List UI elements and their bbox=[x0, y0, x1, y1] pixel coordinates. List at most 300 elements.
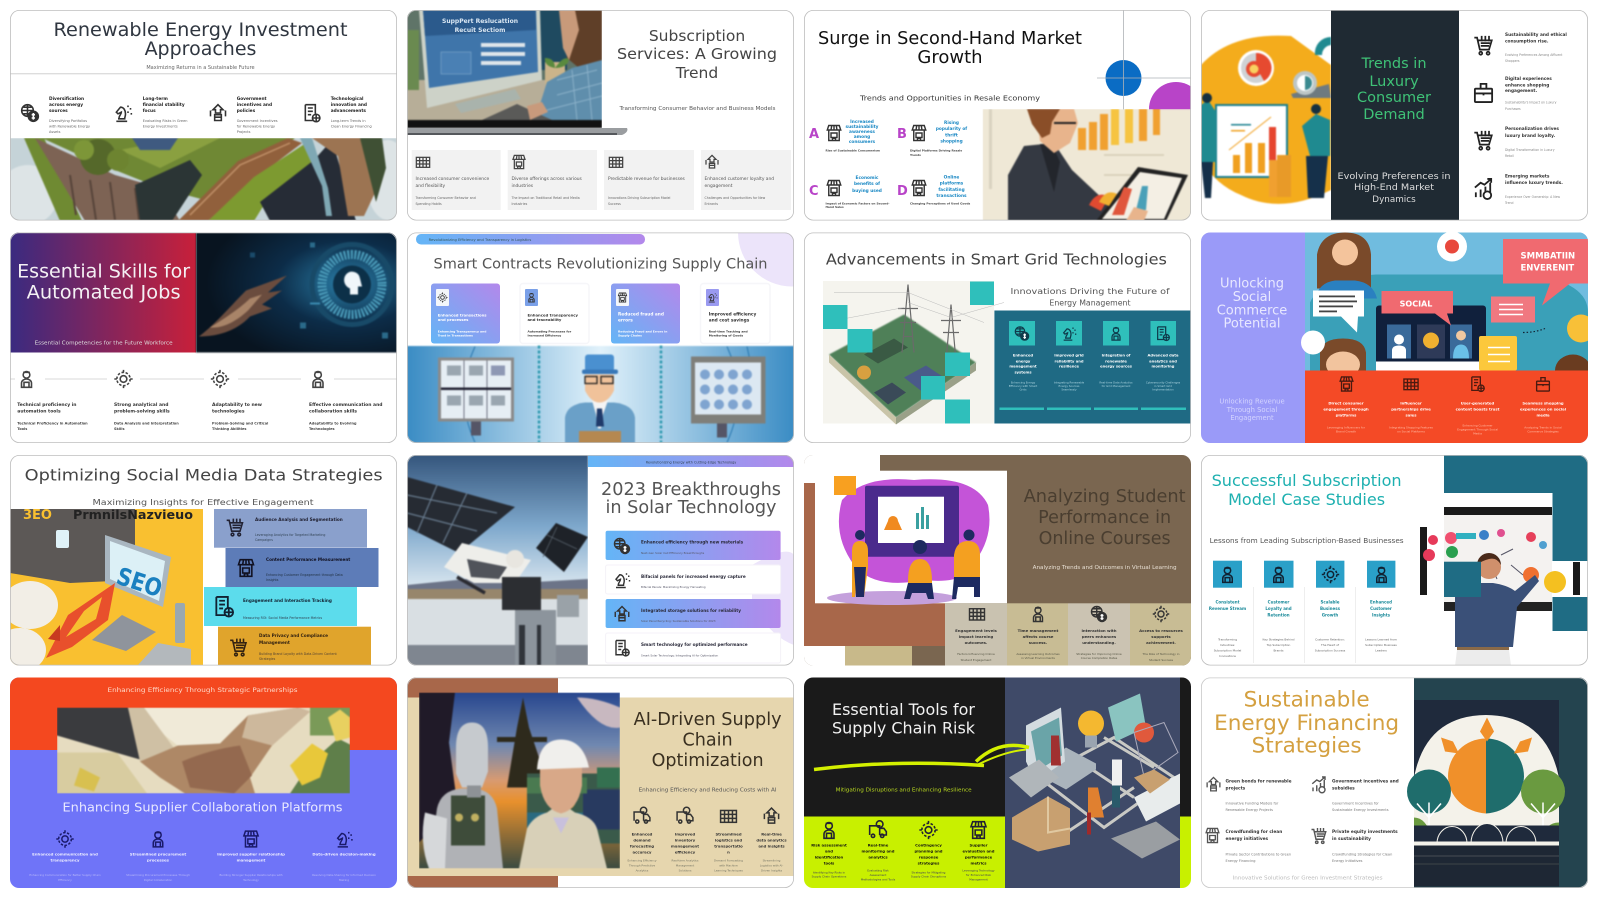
columns: and insights bbox=[758, 844, 785, 848]
bottom cards: achievement. bbox=[1146, 640, 1176, 645]
image: students and presenter bbox=[815, 471, 1007, 605]
cards row: Trust in Transactions bbox=[438, 334, 473, 338]
columns: management bbox=[671, 844, 699, 848]
bottom cards bbox=[945, 603, 1191, 666]
columns: processes bbox=[147, 858, 170, 862]
orange panel with columns: experiences on social bbox=[1520, 406, 1566, 412]
columns: response bbox=[919, 854, 939, 860]
title: Model Case Studies bbox=[1228, 490, 1385, 509]
teal panel with columns: resilience bbox=[1059, 364, 1080, 368]
bottom cards: Access to resources bbox=[1139, 628, 1183, 633]
orange panel with columns: Seamless shopping bbox=[1522, 400, 1564, 406]
slide: Unlocking Social Commerce Potential bbox=[1201, 232, 1595, 444]
item D: Online bbox=[944, 174, 959, 180]
item B bbox=[897, 120, 967, 157]
key points row: Projects bbox=[237, 130, 251, 134]
orange panel with columns: Commerce Strategies bbox=[1527, 430, 1559, 434]
cards row: Entrants bbox=[704, 202, 718, 206]
image: social commerce illustration: ENVERENIT bbox=[1520, 264, 1574, 274]
case study columns: Top Subscription bbox=[1266, 643, 1291, 647]
skills row: Technical Proficiency in Automation bbox=[17, 422, 88, 426]
title: Chain bbox=[682, 730, 733, 750]
cards row: Innovations Driving Subscription Model bbox=[608, 196, 671, 200]
columns: Assessment bbox=[870, 873, 887, 877]
title: Optimizing Social Media Data Strategies bbox=[25, 466, 383, 485]
columns: Solutions bbox=[679, 868, 692, 872]
card 3 bbox=[204, 587, 357, 626]
orange panel with columns: Integrating Shopping Features bbox=[1389, 426, 1433, 430]
orange panel with columns bbox=[1305, 370, 1588, 444]
case study columns: Loyalty and bbox=[1265, 606, 1292, 611]
columns: Supply Chain Disruptions bbox=[911, 874, 947, 878]
title: in Solar Technology bbox=[606, 497, 776, 518]
orange panel with columns: Engagement Through Social bbox=[1457, 428, 1498, 432]
key points row: focus bbox=[143, 108, 156, 114]
key points row: for Renewable Energy bbox=[237, 124, 275, 128]
skills row: Data Analysis and Interpretation bbox=[114, 422, 179, 426]
list items: Bifacial panels for increased energy capture bbox=[641, 574, 746, 579]
background blocks bbox=[804, 455, 945, 666]
key points column: Retail bbox=[1505, 154, 1514, 158]
columns: Streamlined bbox=[715, 832, 742, 836]
columns: for Enhanced Risk bbox=[966, 873, 992, 877]
columns: inventory bbox=[675, 838, 696, 842]
key points row: Long-term Trends in bbox=[331, 119, 366, 123]
title: Commerce bbox=[1217, 304, 1287, 318]
orange panel with columns: Leveraging Influencers for bbox=[1327, 426, 1366, 430]
key points row: policies bbox=[237, 108, 256, 114]
card 4 bbox=[218, 627, 371, 666]
columns: with Machine bbox=[719, 864, 738, 868]
skills row: automation tools bbox=[17, 408, 61, 414]
item D bbox=[897, 174, 971, 205]
card 2: Enhancing Customer Engagement through Data bbox=[266, 573, 343, 577]
strategies grid: Government Incentives for bbox=[1332, 802, 1379, 806]
title: Social bbox=[1233, 290, 1271, 305]
item A: A bbox=[809, 127, 819, 142]
strategies grid: Private Sector Contributions to Green bbox=[1226, 852, 1291, 856]
item D: facilitating bbox=[938, 187, 965, 193]
case study columns: Key Strategies Behind bbox=[1263, 638, 1295, 642]
cards row: Reduced fraud and bbox=[618, 312, 664, 318]
key points column: luxury brand loyalty. bbox=[1505, 133, 1556, 139]
title: Unlocking bbox=[1220, 276, 1284, 292]
item C: buying used bbox=[852, 188, 882, 194]
title: Advancements in Smart Grid Technologies bbox=[826, 250, 1167, 268]
subtitle bbox=[1219, 398, 1285, 422]
teal blocks bbox=[1444, 455, 1588, 631]
key points column: Personalization drives bbox=[1505, 126, 1559, 132]
slide: Renewable Energy Investment Approaches bbox=[0, 10, 410, 225]
card 3: Measuring ROI: Social Media Performance Metrics bbox=[243, 616, 323, 620]
pill label: Revolutionizing Efficiency and Transparency in Logistics bbox=[429, 238, 531, 242]
title bbox=[832, 700, 976, 738]
columns: Data-driven decision-making bbox=[312, 852, 376, 856]
orange panel with columns: partnerships drive bbox=[1391, 406, 1431, 412]
subtitle: Analyzing Trends and Outcomes in Virtual Learning bbox=[1033, 565, 1177, 571]
bottom cards: Factors Influencing Online bbox=[957, 652, 995, 656]
case study columns: Customer bbox=[1268, 600, 1289, 605]
title: Performance in bbox=[1038, 508, 1171, 528]
key points column: Experience Over Ownership: A New bbox=[1505, 195, 1561, 199]
teal panel with columns: analytics and bbox=[1149, 360, 1177, 364]
orange panel with columns: Analyzing Trends in Social bbox=[1524, 426, 1562, 430]
title: Analyzing Student bbox=[1024, 487, 1186, 507]
subtitle: Lessons from Leading Subscription-Based Businesses bbox=[1210, 537, 1404, 545]
slide: Optimizing Social Media Data Strategies bbox=[0, 455, 397, 672]
strategies grid bbox=[1206, 777, 1399, 863]
key points row: Government bbox=[237, 96, 267, 102]
columns: tools bbox=[824, 860, 835, 866]
subtitle: Maximizing Insights for Effective Engagement bbox=[92, 497, 314, 507]
teal panel with columns: in Smart Grid bbox=[1154, 384, 1172, 388]
title: Essential Tools for bbox=[832, 700, 975, 719]
skills row: Tools bbox=[17, 427, 27, 431]
key points column: Shoppers bbox=[1505, 59, 1520, 63]
case study columns: Customer Retention: bbox=[1315, 638, 1345, 642]
skills row: Problem-Solving and Critical bbox=[212, 422, 268, 426]
image title text on screen bbox=[442, 18, 518, 32]
item D: Changing Perceptions of Used Goods bbox=[910, 201, 971, 205]
strategies grid: Renewable Energy Projects bbox=[1226, 808, 1273, 812]
cards row: Real-time Tracking and bbox=[709, 330, 748, 334]
item B: shopping bbox=[940, 138, 963, 144]
columns: Learning Techniques bbox=[714, 868, 743, 872]
key points row: innovation and bbox=[331, 102, 367, 108]
item A: consumers bbox=[849, 139, 876, 145]
key points row: Evaluating Risks in Green bbox=[143, 119, 187, 123]
orange panel with columns: Brand Growth bbox=[1336, 430, 1356, 434]
cards row: Enhanced transparency bbox=[528, 312, 579, 318]
columns: Digital Collaboration bbox=[144, 878, 173, 882]
case study columns: Retention bbox=[1267, 613, 1290, 618]
slide: Trends in Luxury Consumer Demand bbox=[1201, 10, 1588, 221]
slide: Successful Subscription Model Case Studies bbox=[1201, 455, 1588, 666]
card 4: Management bbox=[259, 640, 290, 645]
title: Sustainable bbox=[1244, 688, 1370, 712]
key points row: Diversification bbox=[49, 96, 84, 102]
top bar: Revolutionizing Energy with Cutting-Edge Technology bbox=[646, 460, 736, 464]
key points column: Emerging markets bbox=[1505, 174, 1550, 180]
top bar bbox=[588, 455, 794, 467]
key points row: sources bbox=[49, 108, 68, 114]
title: Services: A Growing bbox=[617, 45, 777, 63]
columns: planning and bbox=[914, 848, 943, 854]
key points column bbox=[1474, 32, 1567, 205]
columns: Leveraging Technology bbox=[962, 868, 995, 872]
title: Potential bbox=[1224, 316, 1280, 332]
key points column: Digital Transformation in Luxury bbox=[1505, 148, 1555, 152]
strategies grid: in sustainability bbox=[1332, 836, 1371, 842]
subtitle bbox=[1010, 287, 1170, 308]
teal panel with columns: Cybersecurity Challenges bbox=[1146, 380, 1181, 384]
title bbox=[634, 710, 782, 771]
cards row: Success bbox=[608, 202, 621, 206]
bottom cards: affects course bbox=[1023, 634, 1054, 639]
key points column: Trend bbox=[1504, 201, 1514, 205]
columns: Supply Chain Operations bbox=[812, 874, 847, 878]
columns: accuracy bbox=[633, 850, 652, 854]
image: logistics worker with screens bbox=[407, 346, 794, 444]
orange panel with columns: Direct consumer bbox=[1328, 400, 1364, 406]
image title text on screen: Recuit Sectiom bbox=[455, 27, 505, 34]
slide: AI-Driven Supply Chain Optimization bbox=[407, 678, 794, 888]
columns: Enhanced bbox=[632, 832, 653, 836]
title: Trends in bbox=[1360, 56, 1427, 72]
teal panel with columns: Enhanced bbox=[1013, 354, 1033, 358]
subtitle: Engagement bbox=[1230, 414, 1274, 422]
image: robot arm with solar panels bbox=[407, 455, 588, 666]
subtitle: Maximizing Returns in a Sustainable Future bbox=[146, 65, 255, 71]
case study columns: Customer bbox=[1370, 606, 1392, 611]
columns: Identifying Key Risks in bbox=[813, 870, 845, 874]
image: social commerce illustration: SOCIAL bbox=[1400, 300, 1432, 308]
teal panel with columns: energy sources bbox=[1100, 364, 1133, 368]
card 3: Engagement and Interaction Tracking bbox=[243, 598, 332, 603]
columns: Contingency bbox=[915, 842, 942, 848]
skills row: Adaptability to new bbox=[212, 402, 262, 408]
subtitle: Transforming Consumer Behavior and Business Models bbox=[618, 106, 776, 112]
columns: Resolving Data-Sharing for Informed Decision bbox=[312, 873, 376, 877]
columns: Management bbox=[969, 878, 989, 882]
cards row: Automating Processes for bbox=[528, 330, 572, 334]
skills row: Technologies bbox=[309, 427, 335, 431]
cards row: Supply Chains bbox=[618, 334, 642, 338]
item A bbox=[809, 119, 880, 153]
columns: and bbox=[825, 848, 833, 854]
skills row: technologies bbox=[212, 408, 245, 414]
skills row: Skills bbox=[114, 427, 125, 431]
case study columns: Revenue Stream bbox=[1209, 606, 1246, 611]
columns bbox=[29, 830, 376, 882]
slide: Advancements in Smart Grid Technologies bbox=[804, 232, 1191, 444]
case study columns: Leaders bbox=[1375, 649, 1387, 653]
image: sun and trees emblem bbox=[1407, 678, 1588, 888]
subtitle: Energy Management bbox=[1049, 298, 1131, 308]
image: laptop and man at computer bbox=[407, 10, 602, 128]
strategies grid: Green bonds for renewable bbox=[1226, 778, 1292, 784]
footer subtitle: Innovative Solutions for Green Investment Strategies bbox=[1233, 876, 1383, 882]
orange panel with columns: Enhancing Customer bbox=[1462, 424, 1493, 428]
image: floating green island bbox=[10, 138, 397, 220]
cards row: Industries bbox=[512, 202, 528, 206]
slide: Sustainable Energy Financing Strategies bbox=[1201, 678, 1588, 888]
card 1 bbox=[214, 509, 367, 548]
teal panel with columns: Grids bbox=[1019, 388, 1027, 392]
cards row: Increased consumer convenience bbox=[416, 176, 489, 182]
title bbox=[19, 264, 190, 302]
case study columns: Enhanced bbox=[1370, 600, 1392, 605]
title: Smart Contracts Revolutionizing Supply Chain bbox=[434, 256, 768, 272]
strategies grid: Innovative Funding Models for bbox=[1226, 802, 1279, 806]
gradient header panel bbox=[10, 232, 196, 352]
columns bbox=[811, 821, 995, 882]
item D: transactions bbox=[936, 193, 967, 199]
title bbox=[601, 479, 781, 518]
bottom cards: Student Engagement bbox=[961, 658, 992, 662]
strategies grid: Energy Financing bbox=[1226, 859, 1256, 863]
slide: Subscription Services bbox=[407, 10, 794, 221]
orange panel with columns: platforms bbox=[1336, 412, 1357, 418]
title bbox=[618, 30, 776, 78]
key points row: Technological bbox=[331, 96, 364, 102]
timeline bbox=[10, 378, 396, 380]
teal panel with columns: Improved grid bbox=[1054, 354, 1084, 358]
title: Surge in Second-Hand Market bbox=[818, 28, 1082, 49]
subtitle: Mitigating Disruptions and Enhancing Resilience bbox=[836, 788, 972, 794]
title bbox=[1357, 56, 1431, 123]
columns: identification bbox=[815, 854, 844, 860]
top subtitle: Enhancing Efficiency Through Strategic Partnerships bbox=[108, 687, 298, 694]
columns: Risk assessment bbox=[811, 842, 847, 848]
teal panel with columns: Enhancing Energy bbox=[1011, 380, 1036, 384]
teal panel with columns: renewable bbox=[1105, 360, 1127, 364]
columns: Driven Insights bbox=[761, 868, 783, 872]
subtitle: Essential Competencies for the Future Workforce bbox=[35, 340, 173, 346]
columns: strategies bbox=[918, 860, 940, 866]
columns: Improved bbox=[675, 832, 695, 836]
columns: Analytics bbox=[636, 868, 649, 872]
orange panel with columns: Media bbox=[1473, 432, 1482, 436]
card 1: Audience Analysis and Segmentation bbox=[255, 517, 343, 522]
slide: Surge in Second-Hand Market Growth bbox=[804, 10, 1203, 221]
list items: Next-Gen Solar Cell Efficiency Breakthroughs bbox=[641, 551, 705, 555]
image: man reviewing charts bbox=[983, 109, 1192, 221]
item D: platforms bbox=[940, 181, 964, 187]
strategies grid: subsidies bbox=[1332, 786, 1355, 792]
columns: transparency bbox=[50, 858, 80, 862]
slide: 2023 Breakthroughs in Solar Technology bbox=[407, 455, 794, 666]
orange panel with columns: media bbox=[1536, 412, 1550, 418]
subtitle bbox=[1338, 172, 1450, 205]
bottom cards: Engagement levels bbox=[955, 628, 998, 633]
teal panel with columns: Integrating Renewable bbox=[1054, 380, 1085, 384]
pill label bbox=[416, 234, 645, 244]
bottom cards: outcomes. bbox=[965, 640, 988, 645]
image title text on screen: SuppPert Reslucattion bbox=[442, 18, 518, 25]
columns: Efficiency bbox=[58, 878, 72, 882]
bottom cards: Assessing Learning Outcomes bbox=[1016, 652, 1060, 656]
columns: monitoring and bbox=[862, 848, 895, 854]
key points column: Evolving Preferences Among Affluent bbox=[1505, 53, 1563, 57]
columns: Supplier bbox=[970, 842, 988, 848]
key points row: advancements bbox=[331, 108, 366, 114]
bottom cards: Time management bbox=[1018, 628, 1059, 633]
key points row: with Renewable Energy bbox=[49, 124, 90, 128]
case study columns: The Heart of bbox=[1320, 643, 1340, 647]
orange panel with columns: Influencer bbox=[1400, 400, 1422, 406]
item A: among bbox=[854, 135, 870, 140]
columns: efficiency bbox=[675, 850, 696, 854]
case study columns: Lessons Learned from bbox=[1365, 638, 1397, 642]
teal panel with columns: Implementation bbox=[1152, 388, 1174, 392]
item C: Economic bbox=[856, 175, 879, 181]
key points row: Diversifying Portfolios bbox=[49, 119, 87, 123]
key points column: consumption rise. bbox=[1505, 39, 1549, 45]
columns: Strategies for Mitigating bbox=[912, 870, 946, 874]
strategies grid: projects bbox=[1226, 786, 1246, 792]
title bbox=[1217, 276, 1287, 332]
teal panel with columns: Seamlessly bbox=[1061, 388, 1077, 392]
title bbox=[1214, 688, 1399, 758]
teal panel with columns: Energy Sources bbox=[1059, 384, 1080, 388]
cards row: errors bbox=[618, 318, 633, 324]
case study columns: Consistent bbox=[1215, 600, 1240, 605]
background blocks bbox=[407, 678, 794, 888]
image: hand touching digital interface bbox=[196, 232, 397, 352]
list items: Smart Solar Technology: Integrating AI for Optimization bbox=[641, 654, 719, 658]
skills row: Technical proficiency in bbox=[17, 402, 77, 408]
image: social commerce illustration: SMMBATIIN bbox=[1520, 252, 1575, 262]
key points row: Clean Energy Financing bbox=[331, 124, 372, 128]
item B: thrift bbox=[945, 132, 958, 138]
image: robot and worker at port bbox=[419, 692, 620, 868]
item B: Rising bbox=[944, 120, 959, 126]
item C: Impact of Economic Factors on Second- bbox=[826, 201, 890, 205]
item C bbox=[809, 175, 890, 209]
columns: Evaluating Risk bbox=[867, 868, 889, 872]
columns: forecasting bbox=[630, 844, 654, 848]
key points column: engagement. bbox=[1505, 88, 1537, 94]
title: Online Courses bbox=[1039, 529, 1171, 549]
title: Renewable Energy Investment bbox=[54, 19, 348, 41]
item C: benefits of bbox=[854, 181, 880, 187]
teal panel with columns bbox=[994, 310, 1191, 424]
subtitle: High-End Market bbox=[1354, 183, 1435, 193]
columns: Building Stronger Supplier Relationships with bbox=[219, 873, 283, 877]
card 2 bbox=[226, 548, 378, 587]
key points row: financial stability bbox=[143, 102, 185, 108]
case study columns: Subscription Success bbox=[1315, 649, 1346, 653]
skills row: Effective communication and bbox=[309, 402, 382, 408]
card 2: Content Performance Measurement bbox=[266, 557, 350, 562]
case study columns: Growth bbox=[1322, 613, 1338, 618]
slide: Analyzing Student Performance in Online Courses bbox=[804, 455, 1191, 666]
cards row: Improved efficiency bbox=[709, 312, 756, 318]
subtitle: Unlocking Revenue bbox=[1219, 398, 1285, 406]
columns: Streamlining Procurement Processes Through bbox=[126, 873, 190, 877]
columns: metrics bbox=[970, 860, 987, 866]
teal panel with columns: reliability and bbox=[1055, 360, 1084, 364]
brush stroke arrow bbox=[814, 745, 1029, 770]
item A: Increased bbox=[850, 119, 874, 125]
list items: Integrated storage solutions for reliability bbox=[641, 608, 741, 613]
orange panel with columns: engagement through bbox=[1323, 406, 1369, 412]
columns: n bbox=[727, 850, 730, 854]
orange panel with columns: on Social Platforms bbox=[1397, 430, 1425, 434]
strategies grid: Energy Initiatives bbox=[1332, 859, 1363, 863]
subtitle: Through Social bbox=[1226, 406, 1277, 414]
subtitle: Trends and Opportunities in Resale Economy bbox=[859, 94, 1041, 103]
cards row bbox=[431, 284, 770, 344]
list items: Bifacial Panels: Maximizing Energy Harvesting bbox=[641, 585, 706, 589]
cards row: industries bbox=[512, 183, 534, 189]
title: Successful Subscription bbox=[1212, 471, 1402, 490]
image: handshake over map bbox=[57, 708, 350, 794]
case study columns: Innovations bbox=[1219, 654, 1236, 658]
key points row: Assets bbox=[49, 130, 61, 134]
bottom cards: The Role of Technology in bbox=[1142, 652, 1180, 656]
bottom cards: impact learning bbox=[959, 634, 993, 639]
orange panel with columns: content boosts trust bbox=[1456, 406, 1500, 412]
teal panel with columns: monitoring bbox=[1152, 364, 1175, 368]
title: Approaches bbox=[145, 38, 256, 60]
case study columns: Industries: bbox=[1220, 643, 1235, 647]
key points row: Energy Investments bbox=[143, 124, 178, 128]
columns: Enhancing Efficiency bbox=[627, 858, 657, 862]
image: SEO rocket and computer: 3EO bbox=[23, 508, 52, 523]
key points row: Long-term bbox=[143, 96, 168, 102]
